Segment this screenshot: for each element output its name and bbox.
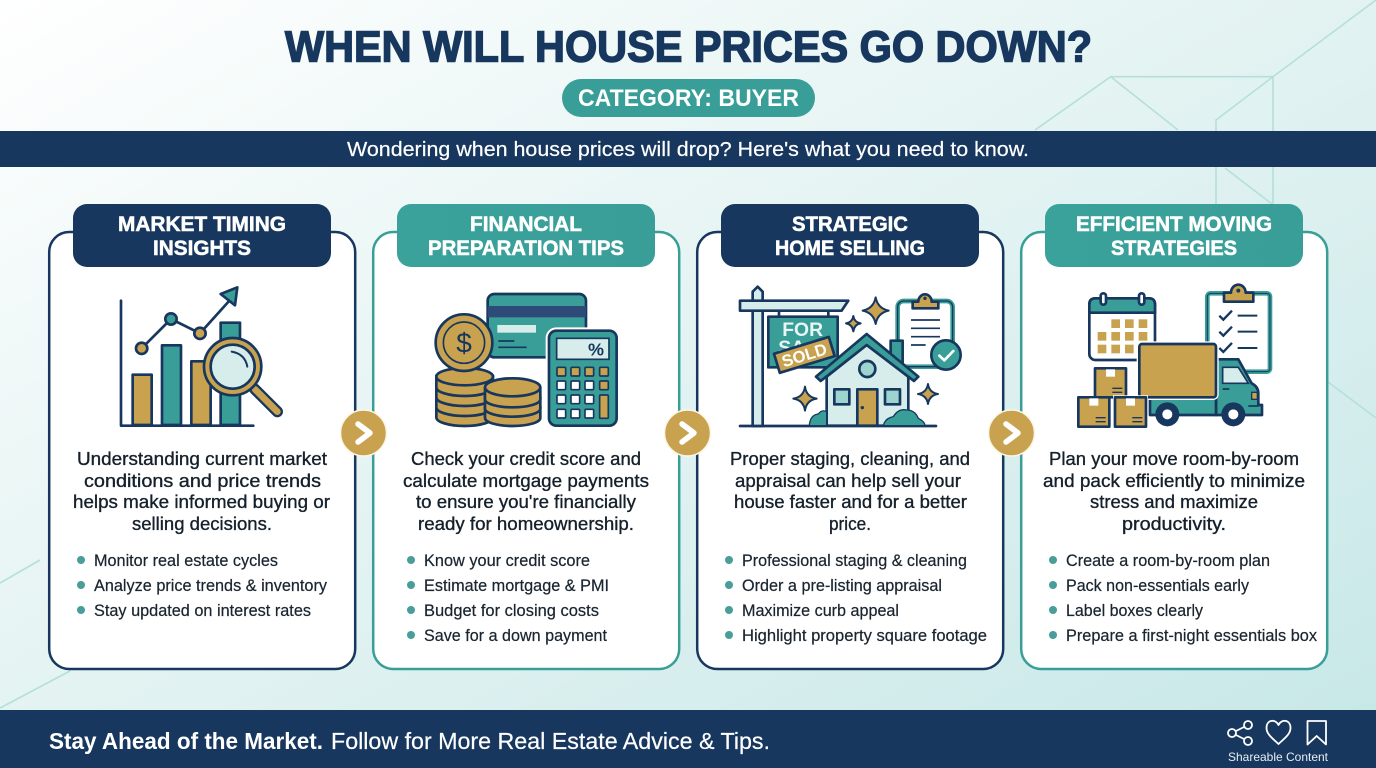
text: selling description: [730, 448, 970, 534]
footer call to action: Stay Ahead of the Market.: [49, 728, 323, 754]
text: selling description: Proper staging, cleaning, and: [730, 448, 970, 469]
list: moving tips: Create a room-by-room plan: [1066, 552, 1270, 570]
list: financial tips: Estimate mortgage & PMI: [424, 577, 609, 595]
panel: financial preparation tips: [373, 204, 679, 669]
subtitle banner: [0, 131, 1376, 167]
category badge: CATEGORY: BUYER: [578, 85, 799, 112]
text: moving description: Plan your move room-by-room: [1049, 448, 1299, 469]
icon: house with sold sign: FOR: [782, 320, 823, 341]
panel: strategic home selling: [697, 204, 1003, 669]
heading: strategic home selling: [721, 204, 979, 267]
text: moving description: [1043, 448, 1305, 534]
list: market timing tips: Stay updated on interest rates: [94, 602, 311, 620]
list: financial tips: [407, 552, 609, 645]
heading: efficient moving strategies: EFFICIENT MOVING: [1076, 213, 1272, 236]
icon: bar chart with magnifier: [121, 287, 277, 426]
list: market timing tips: Analyze price trends & inventory: [94, 577, 328, 595]
icon: house with sold sign: [740, 287, 961, 426]
text: market timing description: helps make informed buying or: [73, 491, 330, 512]
text: selling description: price.: [829, 513, 871, 534]
list: selling tips: Order a pre-listing appraisal: [742, 577, 942, 595]
list: moving tips: Prepare a first-night essentials box: [1066, 627, 1318, 645]
heading: market timing insights: [73, 204, 331, 267]
icon: coins, card and calculator: $: [456, 328, 472, 359]
list: moving tips: [1049, 552, 1318, 645]
text: market timing description: Understanding current market: [77, 448, 327, 469]
heading: strategic home selling: HOME SELLING: [775, 237, 925, 260]
list: financial tips: Save for a down payment: [424, 627, 607, 645]
list: selling tips: Highlight property square footage: [742, 627, 987, 645]
icon: moving truck, calendar, checklist: [1078, 285, 1270, 427]
title: WHEN WILL HOUSE PRICES GO DOWN?: [285, 22, 1092, 72]
text: moving description: and pack efficiently to minimize: [1043, 470, 1305, 491]
list: selling tips: [725, 552, 987, 645]
arrow: step 3 to 4: [988, 410, 1034, 456]
list: selling tips: Professional staging & cleaning: [742, 552, 967, 570]
arrow: step 1 to 2: [340, 410, 386, 456]
text: financial description: ready for homeownership.: [418, 513, 634, 534]
text: financial description: to ensure you're financially: [416, 491, 637, 512]
footer call to action: Follow for More Real Estate Advice & Tips.: [331, 728, 770, 754]
text: market timing description: [73, 448, 330, 534]
heading: financial preparation tips: PREPARATION TIPS: [428, 237, 624, 260]
heading: financial preparation tips: [397, 204, 655, 267]
category badge: [562, 79, 815, 117]
text: financial description: Check your credit score and: [411, 448, 641, 469]
list: selling tips: Maximize curb appeal: [742, 602, 899, 620]
heading: financial preparation tips: FINANCIAL: [470, 213, 582, 236]
icon: coins, card and calculator: [436, 294, 617, 426]
icon: heart: [1266, 721, 1290, 744]
heading: market timing insights: MARKET TIMING: [118, 213, 286, 236]
heading: efficient moving strategies: [1045, 204, 1303, 267]
text: financial description: calculate mortgage payments: [403, 470, 649, 491]
icon: coins, card and calculator: %: [588, 339, 604, 359]
footer call to action: [49, 728, 770, 754]
heading: market timing insights: INSIGHTS: [153, 237, 251, 260]
icon: bookmark: [1308, 721, 1326, 744]
text: selling description: appraisal can help sell your: [735, 470, 961, 491]
text: selling description: house faster and for a better: [734, 491, 967, 512]
text: moving description: productivity.: [1122, 513, 1226, 534]
text: financial description: [403, 448, 649, 534]
list: moving tips: Pack non-essentials early: [1066, 577, 1250, 595]
icon: share: [1228, 721, 1252, 745]
icon: house with sold sign: SA: [778, 338, 805, 359]
list: moving tips: Label boxes clearly: [1066, 602, 1204, 620]
heading: efficient moving strategies: STRATEGIES: [1111, 237, 1237, 260]
text: market timing description: conditions and price trends: [84, 470, 321, 491]
panel: efficient moving strategies: [1021, 204, 1327, 669]
shareable content label: Shareable Content: [1228, 750, 1329, 764]
list: financial tips: Budget for closing costs: [424, 602, 599, 620]
list: market timing tips: [77, 552, 328, 620]
text: moving description: stress and maximize: [1090, 491, 1258, 512]
text: market timing description: selling decisions.: [132, 513, 272, 534]
panel: market timing insights: [49, 204, 355, 669]
footer bar: [0, 710, 1376, 768]
heading: strategic home selling: STRATEGIC: [792, 213, 908, 236]
list: financial tips: Know your credit score: [424, 552, 590, 570]
subtitle banner: Wondering when house prices will drop? Here's what you need to know.: [347, 138, 1029, 161]
arrow: step 2 to 3: [664, 410, 710, 456]
icon: house with sold sign: SOLD: [780, 340, 829, 371]
list: market timing tips: Monitor real estate cycles: [94, 552, 278, 570]
